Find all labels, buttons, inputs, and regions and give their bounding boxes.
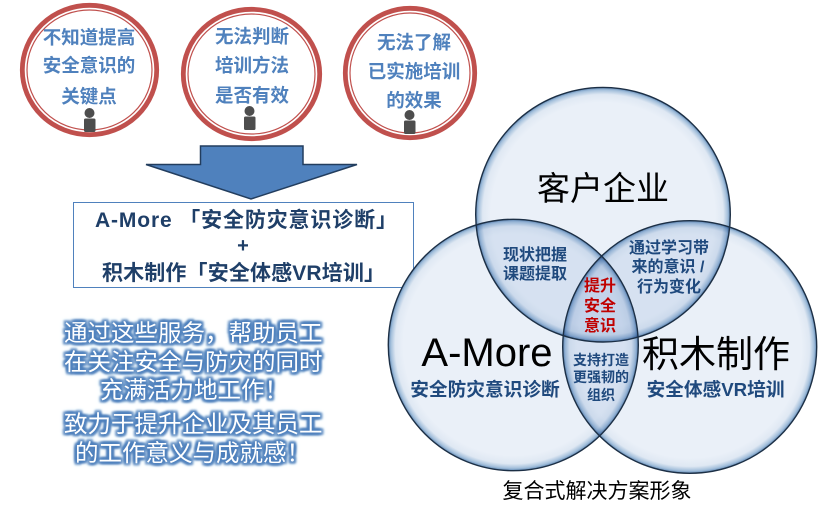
problem circle 2: 培训方法 — [215, 55, 289, 76]
label: A-More: A-More — [421, 331, 553, 375]
service box: 积木制作「安全体感VR培训」 — [102, 261, 385, 285]
arrow: down — [146, 146, 357, 199]
problem circle 1: 安全意识的 — [43, 55, 135, 76]
problem circle 2: 是否有效 — [215, 85, 289, 106]
label: top-right overlap: 通过学习带 — [629, 238, 709, 257]
problem circle 3 — [345, 8, 475, 138]
label: diagnosis: 安全防灾意识诊断 — [410, 379, 560, 400]
label: centre: 安全 — [584, 296, 616, 315]
caption: 复合式解决方案形象 — [502, 480, 692, 503]
message 1: 在关注安全与防灾的同时 — [64, 348, 322, 374]
service box: A-More 「安全防灾意识诊断」 — [95, 208, 397, 232]
problem circle 3: 已实施培训 — [368, 61, 460, 82]
problem circle 3: 的效果 — [386, 90, 442, 111]
label: bottom overlap: 更强韧的 — [573, 369, 629, 385]
problem circle 1: 不知道提高 — [43, 27, 135, 48]
message 1: 充满活力地工作！ — [100, 377, 288, 403]
service box: + — [237, 235, 249, 257]
label: centre: 意识 — [584, 316, 616, 335]
label: VR training: 安全体感VR培训 — [646, 379, 785, 400]
label: customer: 客户企业 — [537, 170, 669, 207]
label: bottom overlap — [573, 352, 629, 403]
circle: Tsumiki — [563, 221, 817, 473]
message 2: 的工作意义与成就感！ — [75, 440, 310, 466]
problem circle 2: 无法判断 — [215, 26, 289, 47]
label: bottom overlap: 支持打造 — [573, 352, 629, 368]
service box — [74, 202, 414, 288]
message 2: 致力于提升企业及其员工 — [64, 411, 322, 437]
label: top-right overlap — [629, 238, 709, 296]
problem circle 1: 关键点 — [61, 86, 117, 107]
circle: A-More — [388, 219, 638, 471]
message 2 — [60, 408, 326, 468]
label: top-left overlap — [503, 245, 567, 283]
label: top-right overlap: 行为变化 — [637, 277, 701, 296]
label: top-left overlap: 课题提取 — [503, 265, 567, 283]
label: top-right overlap: 来的意识 / — [632, 257, 705, 276]
message 1 — [61, 317, 326, 405]
venn diagram — [388, 87, 817, 473]
label: centre: 提升 — [584, 277, 616, 295]
label: top-left overlap: 现状把握 — [503, 245, 567, 264]
label: centre — [584, 277, 616, 335]
problem circle 1 — [22, 5, 157, 135]
label: bottom overlap: 组织 — [587, 387, 615, 403]
icon: person 1 — [84, 108, 96, 132]
problem circle 2 — [183, 9, 320, 139]
icon: person 2 — [244, 106, 256, 130]
label: Tsumiki: 积木制作 — [642, 334, 790, 375]
message 1: 通过这些服务，帮助员工 — [64, 320, 322, 346]
icon: person 3 — [404, 110, 416, 134]
circle: customer — [476, 87, 730, 342]
problem circle 3: 无法了解 — [377, 32, 451, 53]
